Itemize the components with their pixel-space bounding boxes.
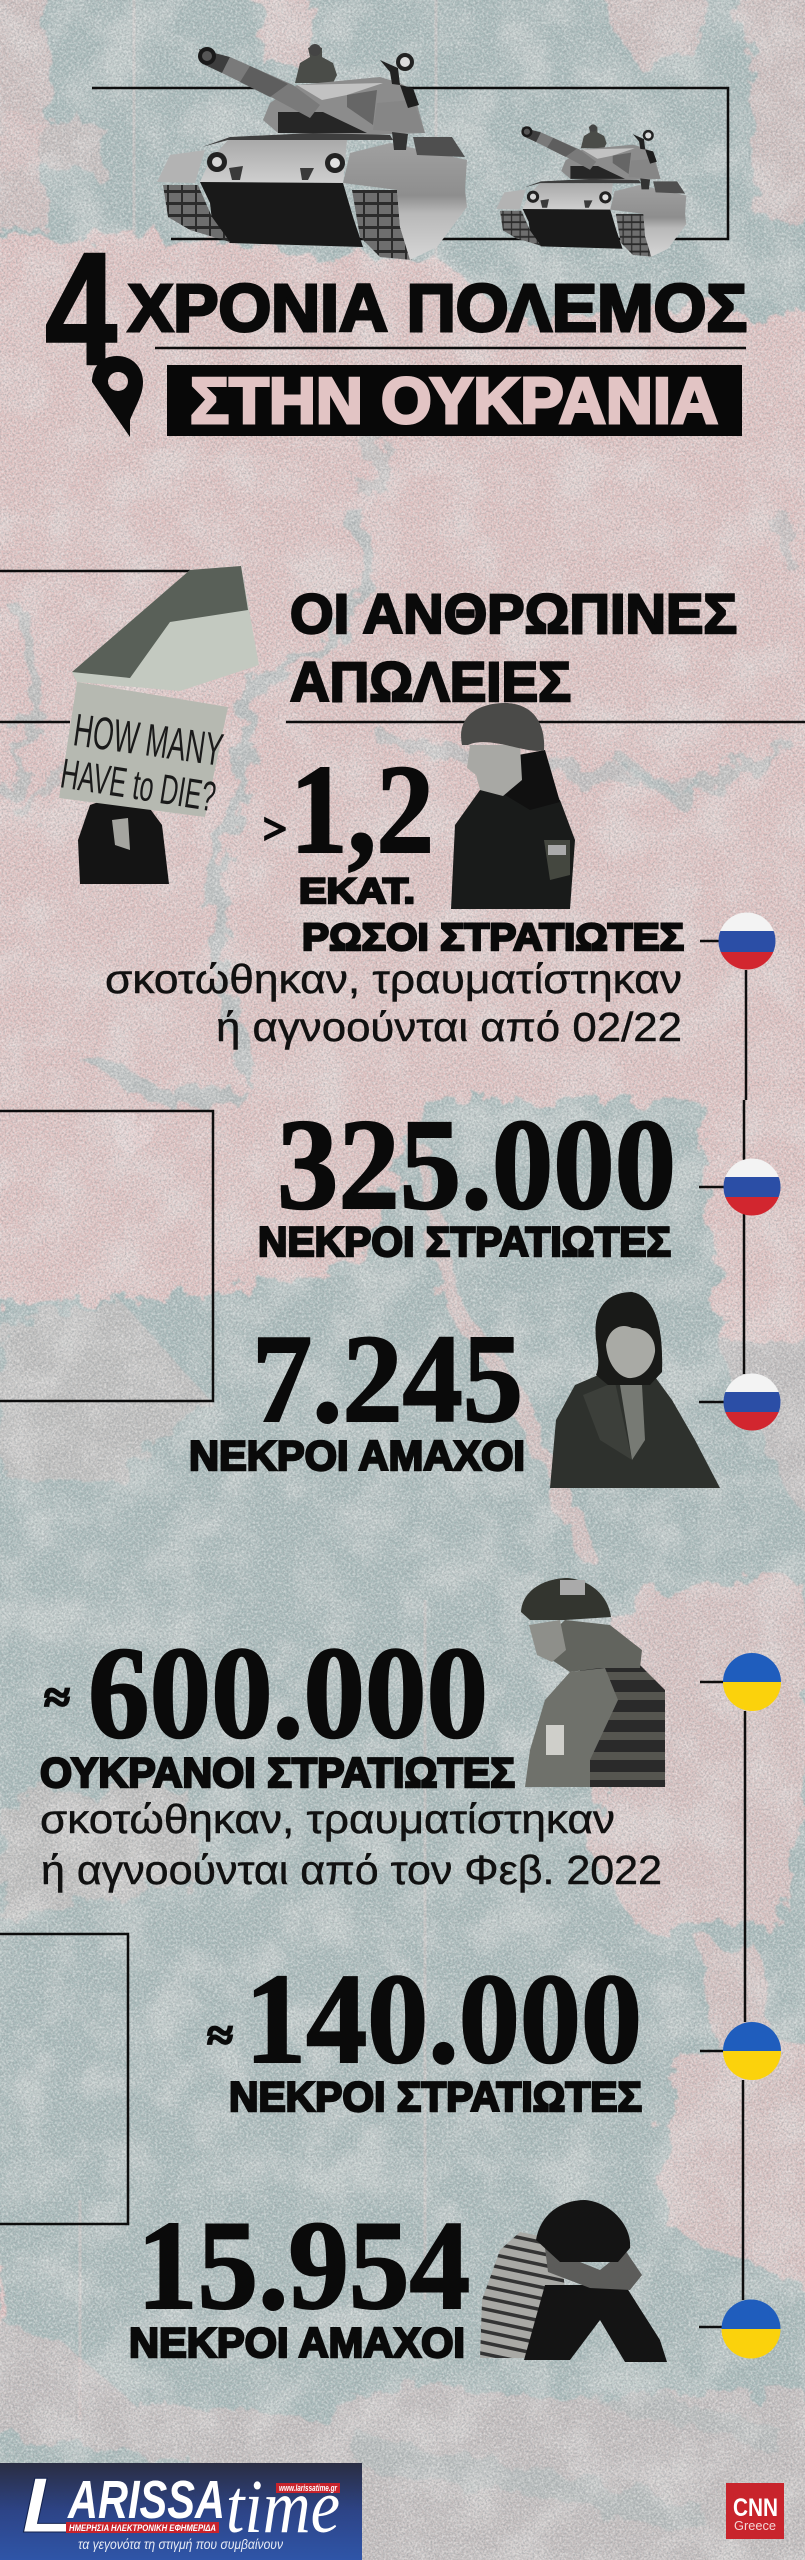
stat: 7,245 dead civilians: ΝΕΚΡΟΙ ΑΜΑΧΟΙ xyxy=(189,1432,525,1479)
photo: sitting child xyxy=(480,2200,667,2362)
description: σκοτώθηκαν, τραυματίστηκαν xyxy=(105,956,682,1002)
photo: woman civilian xyxy=(550,1292,720,1488)
stat: 600,000 Ukrainian soldiers: ΟΥΚΡΑΝΟΙ ΣΤΡΑΤΙΩΤΕΣ xyxy=(40,1749,515,1796)
logo: Larissa Time xyxy=(0,2461,362,2560)
description: ή αγνοούνται από τον Φεβ. 2022 xyxy=(41,1847,662,1893)
title banner: ΣΤΗΝ ΟΥΚΡΑΝΙΑ xyxy=(190,364,718,437)
logo tagline: τα γεγονότα τη στιγμή που συμβαίνουν xyxy=(78,2536,283,2552)
protest sign: HAVE to DIE? xyxy=(58,749,219,820)
icon: Ukrainian flag marker 3 xyxy=(721,2299,781,2360)
description: σκοτώθηκαν, τραυματίστηκαν xyxy=(40,1796,615,1842)
icon: Russian flag marker 2 xyxy=(723,1158,781,1217)
timeline: Ukraine xyxy=(699,1652,782,2360)
photo: Russian soldier xyxy=(451,703,575,909)
stat: 7,245 dead civilians xyxy=(189,1310,525,1479)
illustration: large tank xyxy=(157,44,467,260)
stat: 1.2 million Russian soldiers xyxy=(105,740,684,1050)
icon: Ukrainian flag marker 2 xyxy=(722,2021,782,2081)
icon: Ukrainian flag marker 1 xyxy=(722,1652,782,1712)
connectors xyxy=(699,1682,725,2327)
empty frame: left lower xyxy=(0,1934,128,2224)
icon: map pin xyxy=(92,356,143,437)
description: ή αγνοούνται από 02/22 xyxy=(216,1004,682,1050)
label: ΡΩΣΟΙ ΣΤΡΑΤΙΩΤΕΣ xyxy=(302,917,684,959)
logo: CNN Greece: Greece xyxy=(734,2518,776,2533)
greater-than sign: > xyxy=(263,807,287,853)
stat: 7,245 dead civilians: 7.245 xyxy=(252,1310,523,1449)
stat: 140,000 dead soldiers: ΝΕΚΡΟΙ ΣΤΡΑΤΙΩΤΕΣ xyxy=(229,2073,642,2120)
approx sign: ≈ xyxy=(44,1673,70,1722)
empty frame: left upper xyxy=(0,1111,213,1401)
stat: 600,000 Ukrainian soldiers: 600.000 xyxy=(88,1619,488,1766)
unit: ΕΚΑΤ. xyxy=(299,872,415,911)
logo letter L: L xyxy=(22,2461,74,2549)
stat: 140,000 dead soldiers: ≈ xyxy=(207,2011,233,2060)
protest sign: HOW MANY xyxy=(71,703,226,776)
title block xyxy=(45,219,747,437)
stat: 600,000 Ukrainian soldiers xyxy=(40,1619,662,1893)
logo word time: time xyxy=(226,2465,340,2549)
photo: protester with sign and flag xyxy=(58,566,259,884)
title line 1: ΧΡΟΝΙΑ ΠΟΛΕΜΟΣ xyxy=(128,271,747,346)
timeline: Russia xyxy=(699,912,781,1432)
heading: human losses xyxy=(290,582,737,713)
logo: CNN Greece: CNN xyxy=(733,2494,778,2522)
stat: 140,000 dead soldiers: 140.000 xyxy=(245,1947,642,2090)
connectors xyxy=(699,941,725,1402)
heading: human losses: ΑΠΩΛΕΙΕΣ xyxy=(290,650,571,713)
number: 1,2 xyxy=(290,740,434,880)
flag xyxy=(72,566,259,691)
logo url tag: www.larissatime.gr xyxy=(279,2483,337,2493)
photo: Ukrainian soldier xyxy=(521,1578,665,1787)
section header frame lines xyxy=(0,571,805,722)
frame behind tanks xyxy=(92,88,728,239)
big numeral 4: 4 xyxy=(45,219,117,398)
icon: Russian flag marker 3 xyxy=(723,1373,781,1432)
logo word ARISSA: ARISSA xyxy=(66,2470,225,2530)
stat: 15,954 dead civilians: ΝΕΚΡΟΙ ΑΜΑΧΟΙ xyxy=(129,2319,465,2366)
illustration: small tank xyxy=(496,124,686,257)
heading: human losses: ΟΙ ΑΝΘΡΩΠΙΝΕΣ xyxy=(290,582,737,645)
description xyxy=(105,956,682,1050)
stat: 325,000 dead soldiers: 325.000 xyxy=(277,1093,676,1237)
description xyxy=(40,1796,662,1893)
icon: Russian flag marker 1 xyxy=(718,912,776,972)
protest sign xyxy=(58,682,228,820)
stat: 325,000 dead soldiers: ΝΕΚΡΟΙ ΣΤΡΑΤΙΩΤΕΣ xyxy=(258,1218,671,1265)
logo subtitle strip: ΗΜΕΡΗΣΙΑ ΗΛΕΚΤΡΟΝΙΚΗ ΕΦΗΜΕΡΙΔΑ xyxy=(69,2523,216,2534)
logo: CNN Greece xyxy=(726,2483,784,2539)
stat: 15,954 dead civilians: 15.954 xyxy=(137,2196,470,2336)
